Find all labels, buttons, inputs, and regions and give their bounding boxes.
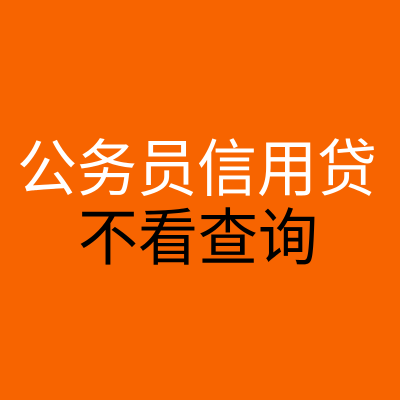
subtitle line: black: 不看查询 — [78, 204, 318, 273]
title line: white: 公务员信用贷 — [17, 135, 377, 204]
